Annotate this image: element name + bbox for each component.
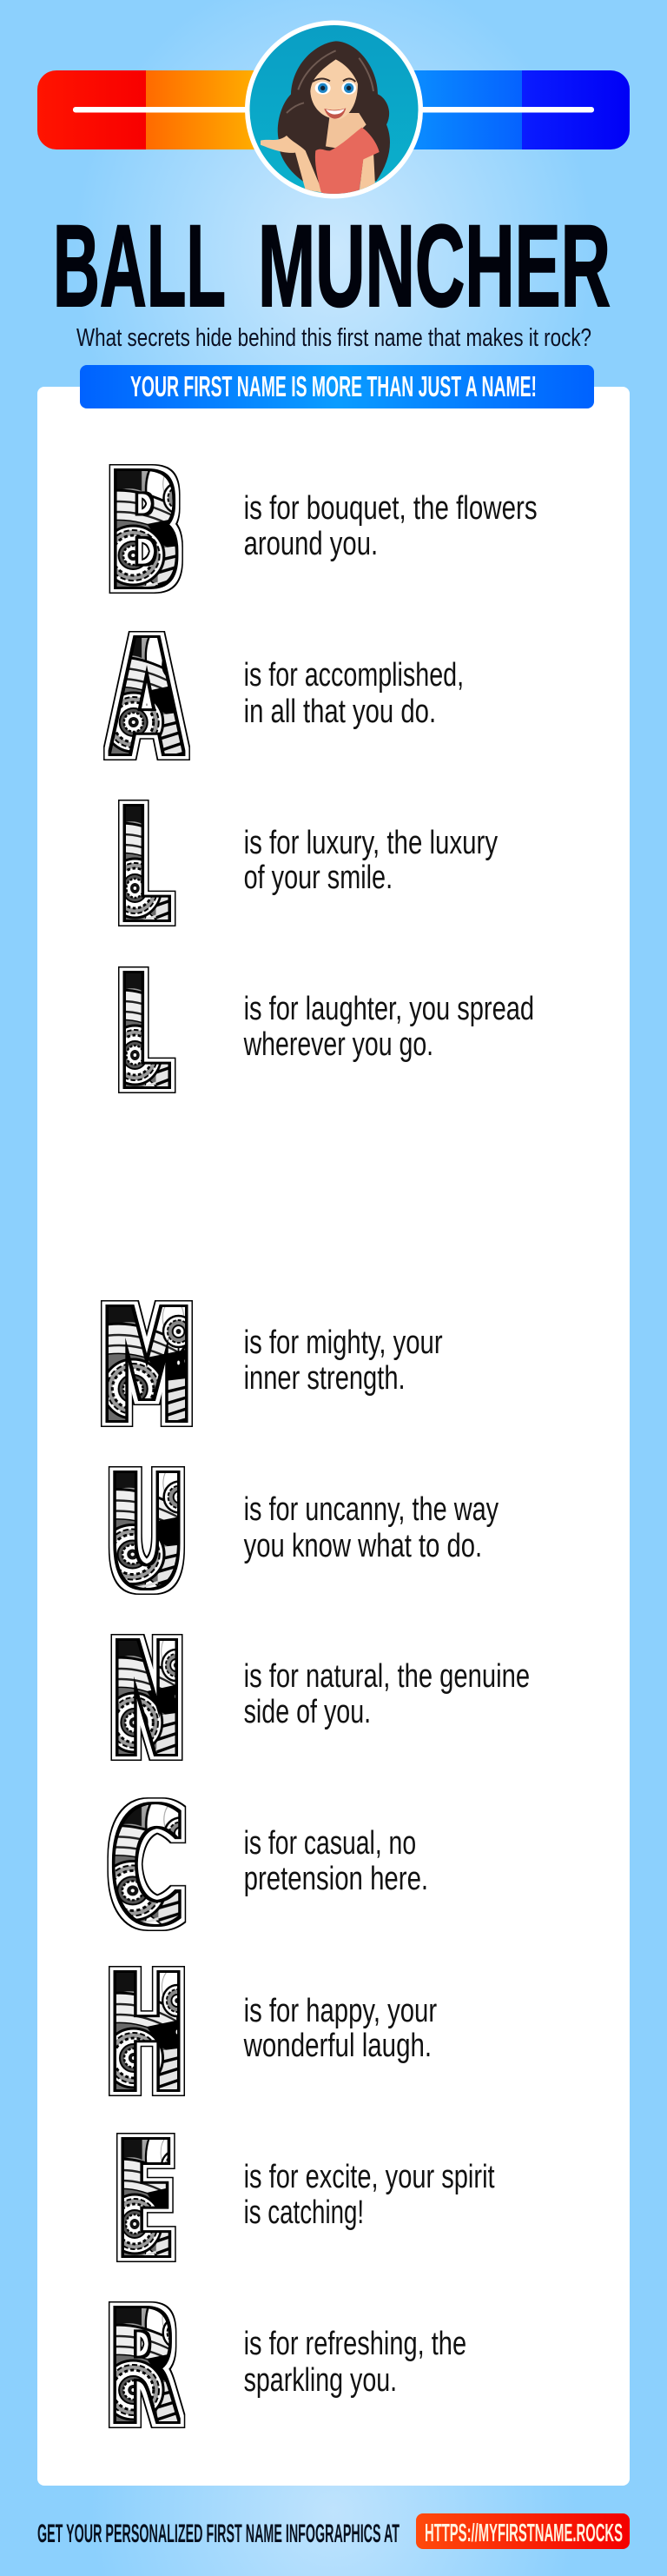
letter L: L: [118, 943, 170, 1124]
text: natural: is for natural, the genuine: [244, 1658, 530, 1695]
letter L: L: [118, 776, 170, 957]
row: E: [116, 2108, 495, 2294]
row: U: [108, 1443, 499, 1623]
row: M: [100, 1277, 443, 1457]
text: happy: is for happy, your: [244, 1993, 437, 2029]
row: C: [110, 1776, 428, 1960]
row: R: [108, 2278, 466, 2458]
text: accomplished: in all that you do.: [244, 694, 436, 730]
text: happy: [243, 1993, 437, 2064]
header gradient bar: [37, 70, 630, 149]
text: refreshing: sparkling you.: [244, 2362, 397, 2399]
letter N: N: [110, 1611, 183, 1791]
row: N: [110, 1611, 530, 1791]
letter H: H: [108, 1942, 186, 2128]
text: accomplished: is for accomplished,: [244, 657, 464, 694]
text: casual: pretension here.: [244, 1861, 428, 1897]
letter E: E: [116, 2108, 175, 2294]
letter M: M: [100, 1277, 194, 1457]
banner: [80, 365, 594, 408]
text: casual: [244, 1825, 428, 1897]
text: luxury: [244, 825, 498, 896]
text: bouquet: [244, 490, 538, 562]
text: refreshing: is for refreshing, the: [244, 2326, 466, 2362]
text: mighty: is for mighty, your: [244, 1325, 443, 1361]
row: H: [108, 1942, 437, 2128]
row: L: [118, 776, 498, 957]
text: bouquet: is for bouquet, the flowers: [244, 490, 538, 527]
text: accomplished: [244, 657, 464, 730]
text: luxury: of your smile.: [244, 860, 393, 896]
text: laughter: [243, 991, 534, 1063]
text: refreshing: [244, 2326, 466, 2399]
text: mighty: inner strength.: [244, 1360, 406, 1397]
text: natural: [244, 1658, 530, 1730]
row: L second: [118, 943, 534, 1124]
title: BALL: [53, 202, 226, 331]
letter U: U: [108, 1443, 186, 1623]
row: A: [110, 607, 464, 792]
text: excite: is for excite, your spirit: [244, 2159, 495, 2195]
text: excite: is catching!: [244, 2194, 364, 2231]
row: B: [108, 439, 538, 624]
text: casual: is for casual, no: [244, 1825, 416, 1862]
text: happy: wonderful laugh.: [243, 2028, 432, 2064]
text: natural: side of you.: [244, 1694, 371, 1730]
text: bouquet: around you.: [244, 526, 378, 562]
letter A: A: [110, 607, 183, 792]
white content panel: [37, 387, 630, 2486]
text: uncanny: you know what to do.: [244, 1528, 482, 1564]
letter R: R: [108, 2278, 179, 2458]
text: laughter: wherever you go.: [243, 1026, 433, 1063]
text: mighty: [244, 1325, 443, 1397]
text: luxury: is for luxury, the luxury: [244, 825, 498, 861]
text: excite: [244, 2159, 495, 2231]
letter C: C: [110, 1776, 185, 1960]
text: uncanny: [244, 1491, 499, 1564]
title: [53, 202, 611, 331]
text: laughter: is for laughter, you spread: [244, 991, 534, 1027]
letter B: B: [108, 439, 182, 624]
avatar portrait: [245, 21, 423, 198]
text: uncanny: is for uncanny, the way: [244, 1491, 499, 1528]
footer url button: [416, 2513, 630, 2549]
